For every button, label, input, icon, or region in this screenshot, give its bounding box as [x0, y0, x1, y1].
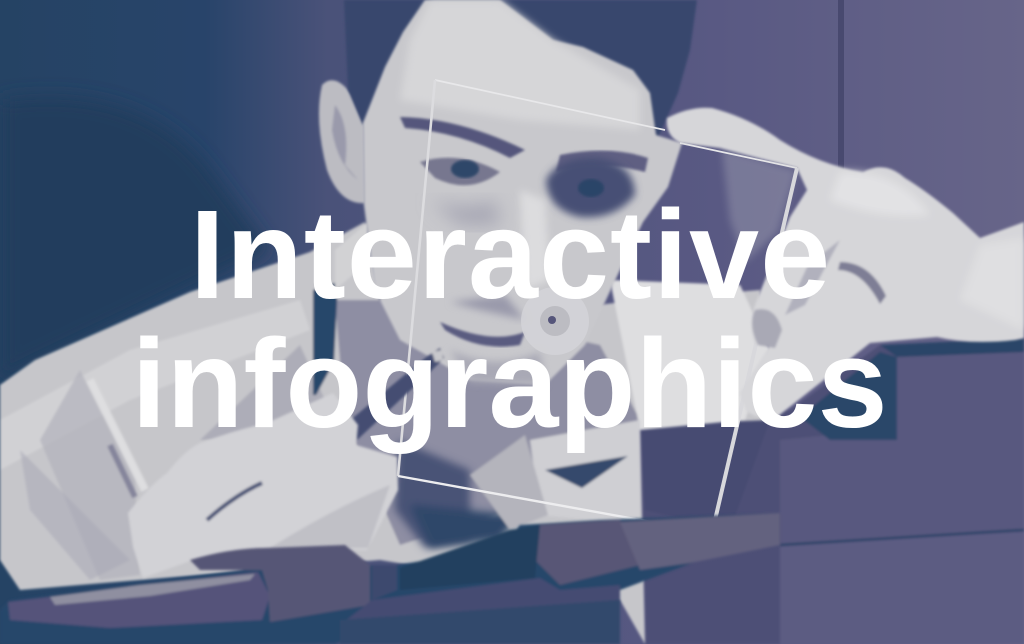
- chin: [450, 350, 545, 385]
- photo: man's head: [319, 0, 697, 385]
- photo: man's right hand holding glass: [667, 108, 1024, 418]
- bullet hole in glass: [521, 287, 589, 355]
- eye: right with socket shadow: [546, 158, 635, 217]
- photo: glass pane: [398, 80, 797, 533]
- photo: shirt: [0, 222, 770, 644]
- photo: man's left hand holding pen: [128, 393, 398, 578]
- title: [131, 184, 888, 454]
- photo: pen: [348, 348, 444, 440]
- photo: wooden box: [640, 338, 1024, 644]
- cheek and nose shading: [430, 200, 500, 225]
- face: [363, 0, 682, 385]
- mouth: [440, 322, 525, 347]
- photo: rifle: [0, 513, 780, 644]
- eye: left: [420, 158, 500, 185]
- title line: Interactive: Interactive: [190, 184, 831, 325]
- ear: [319, 80, 365, 203]
- hair: [344, 0, 697, 140]
- title line: infographics: infographics: [131, 313, 888, 454]
- eyebrows: [400, 117, 525, 158]
